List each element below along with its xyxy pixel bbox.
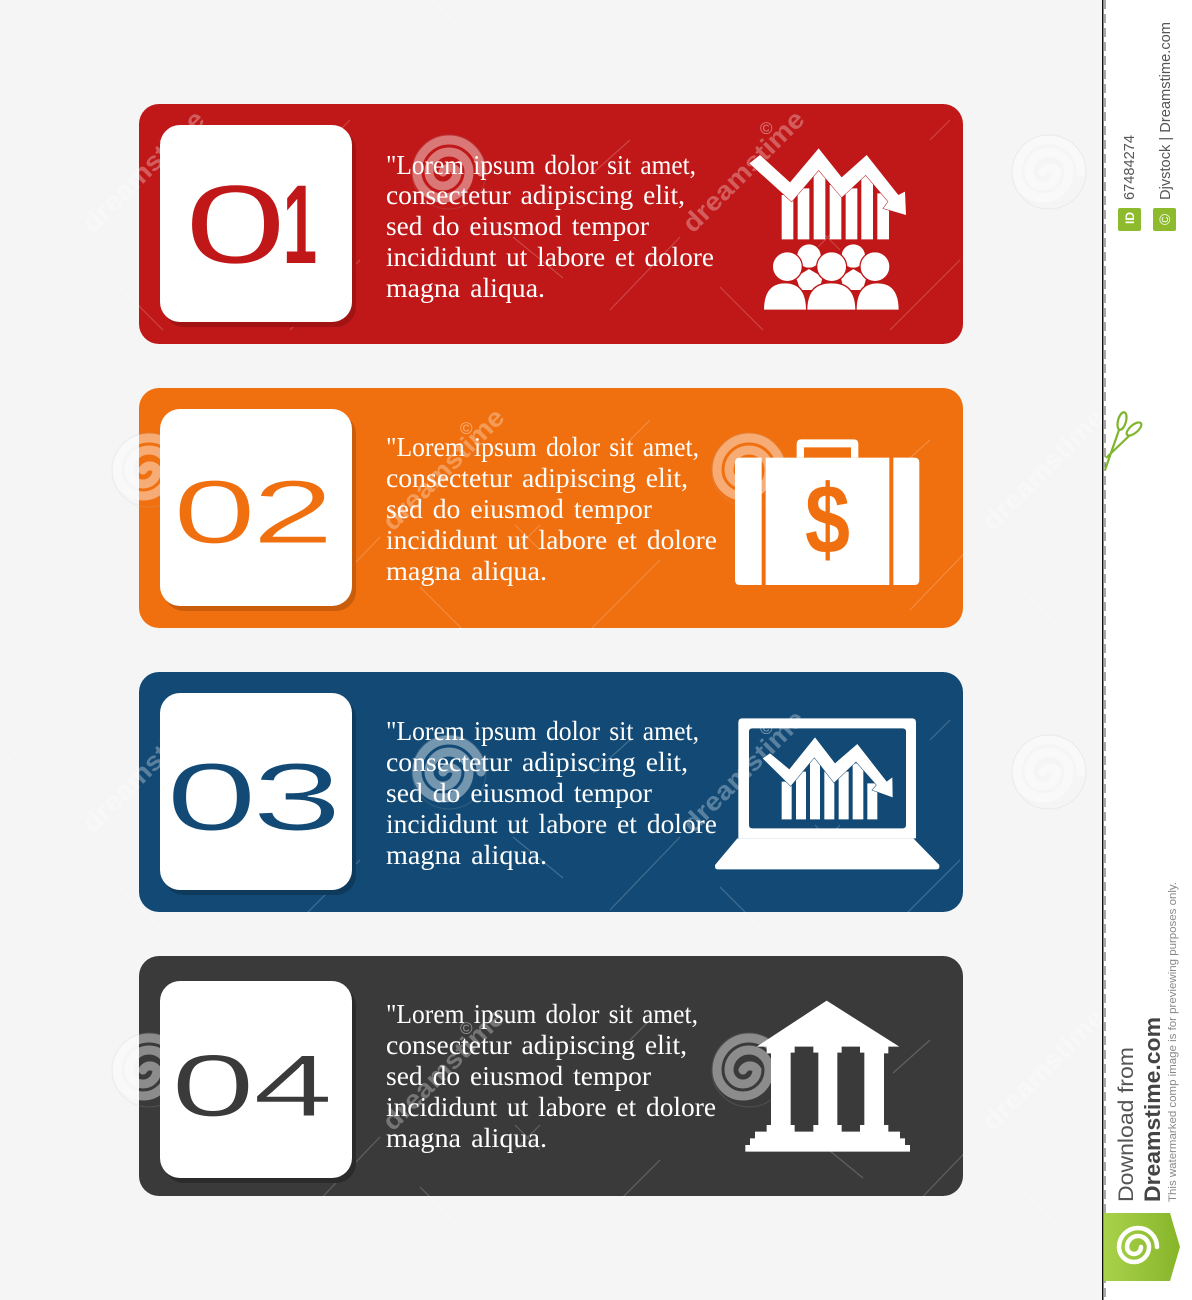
number 02 <box>173 463 334 563</box>
number card 01 <box>160 125 356 327</box>
watermark layer: dreamstime <box>376 402 510 536</box>
text block: step 3: incididunt ut labore et dolore <box>386 809 717 839</box>
watermark layer: dreamstime <box>976 402 1110 536</box>
number 02: 0 <box>173 463 256 563</box>
panel: step 1 background <box>139 104 963 344</box>
text block: step 4: sed do eiusmod tempor <box>386 1061 651 1091</box>
icon: laptop with falling chart <box>715 718 939 869</box>
number 04 <box>171 1036 333 1135</box>
number 04: 0 <box>171 1036 255 1135</box>
badge: ID: ID <box>1123 212 1137 224</box>
watermark layer: © <box>460 1019 473 1038</box>
text block: step 3: sed do eiusmod tempor <box>386 778 652 808</box>
text block: step 4: magna aliqua. <box>386 1123 547 1153</box>
author credit: Djvstock | Dreamstime.com <box>1157 22 1174 200</box>
text block: step 1: incididunt ut labore et dolore <box>386 242 714 272</box>
green ribbon logo <box>1104 1213 1180 1281</box>
sidebar divider <box>1102 0 1105 1300</box>
number 02: 2 <box>252 463 334 563</box>
number card 02 <box>160 409 356 611</box>
text block: step 4: consectetur adipiscing elit, <box>386 1030 687 1060</box>
text block: step 2: "Lorem ipsum dolor sit amet, <box>386 432 699 462</box>
badge: copyright <box>1153 208 1176 231</box>
watermark layer: dreamstime <box>376 1002 510 1136</box>
number card 04 <box>160 981 356 1183</box>
number 03: 0 <box>166 744 257 851</box>
image id number: 67484274 <box>1121 135 1138 200</box>
watermark layer: © <box>760 719 773 738</box>
text block: step 4 <box>386 999 716 1153</box>
preview disclaimer: This watermarked comp image is for previewing purposes only. <box>1167 882 1179 1202</box>
sidebar background <box>1104 0 1192 1300</box>
text block: step 2: magna aliqua. <box>386 556 547 586</box>
watermark layer: dreamstime <box>676 104 810 238</box>
dreamstime bold line: Dreamstime.com <box>1140 1017 1165 1202</box>
text block: step 1: consectetur adipiscing elit, <box>386 180 685 210</box>
badge: ID <box>1118 208 1141 231</box>
text block: step 1 <box>386 150 714 303</box>
panel: step 3 background <box>139 672 963 912</box>
text block: step 4: "Lorem ipsum dolor sit amet, <box>386 999 698 1029</box>
watermark layer: dreamstime <box>76 104 210 238</box>
text block: step 1: "Lorem ipsum dolor sit amet, <box>386 150 696 180</box>
number card 03 <box>160 693 356 895</box>
icon: scissors <box>1105 411 1143 470</box>
panel: step 2 background <box>139 388 963 628</box>
badge: copyright: © <box>1157 214 1174 225</box>
number 03: 3 <box>252 744 342 851</box>
watermark layer: © <box>460 419 473 438</box>
text block: step 1: magna aliqua. <box>386 273 545 303</box>
text block: step 3: "Lorem ipsum dolor sit amet, <box>386 716 699 746</box>
text block: step 3 <box>386 716 717 870</box>
text block: step 1: sed do eiusmod tempor <box>386 211 649 241</box>
watermark layer: © <box>760 119 773 138</box>
icon: falling chart above people <box>749 148 906 310</box>
watermark layer: dreamstime <box>976 1002 1110 1136</box>
number 04: 4 <box>253 1036 333 1135</box>
icon: money briefcase <box>735 439 919 585</box>
number 01: 1 <box>283 162 317 287</box>
text block: step 3: magna aliqua. <box>386 840 547 870</box>
text block: step 4: incididunt ut labore et dolore <box>386 1092 716 1122</box>
text block: step 2 <box>386 432 717 586</box>
number 03 <box>166 744 342 851</box>
text block: step 2: sed do eiusmod tempor <box>386 494 652 524</box>
download line: Download from <box>1115 1047 1138 1202</box>
icon: bank building <box>745 1001 910 1152</box>
text block: step 2: incididunt ut labore et dolore <box>386 525 717 555</box>
watermark layer: dreamstime <box>676 704 810 838</box>
panel: step 4 background <box>139 956 963 1196</box>
number 01 <box>184 162 317 287</box>
text block: step 2: consectetur adipiscing elit, <box>386 463 688 493</box>
number 01: 0 <box>184 162 287 287</box>
watermark layer: dreamstime <box>76 704 210 838</box>
dollar sign: $ <box>805 464 850 574</box>
text block: step 3: consectetur adipiscing elit, <box>386 747 688 777</box>
